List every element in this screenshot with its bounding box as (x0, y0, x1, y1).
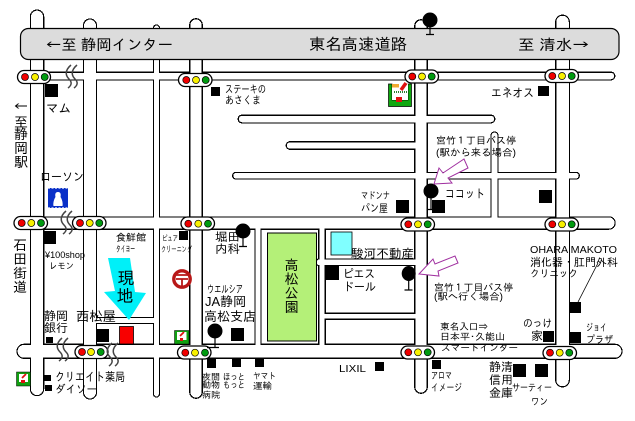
map labels: ステーキの (225, 84, 266, 96)
park name: 園 (284, 299, 298, 315)
vertical label: to Shizuoka station: 静 (14, 126, 28, 142)
map labels: ¥100shop (44, 250, 85, 261)
icon: small convenience store (16, 372, 30, 386)
leader line to clinic (578, 263, 598, 302)
vertical label: to Shizuoka station (14, 99, 28, 170)
map labels: クリエイト薬局 (55, 370, 125, 384)
map labels: スマートインター (441, 343, 518, 354)
map labels: ヤマト (253, 371, 276, 381)
map labels: 銀行 (44, 321, 68, 335)
map labels: 消化器・肛門外科 (530, 256, 618, 269)
map labels: もっと (223, 380, 245, 390)
map labels: 静岡 (44, 309, 68, 323)
site label (116, 269, 134, 306)
map labels: タイヨー (116, 244, 135, 254)
vertical label: to Shizuoka station: 至 (14, 114, 28, 130)
map labels: 宮竹１丁目バス停 (436, 135, 516, 147)
map labels: イメージ (431, 382, 462, 394)
map labels: ピエス (343, 267, 375, 281)
map labels: ワン (531, 397, 548, 408)
map labels: 食鮮館 (116, 232, 146, 244)
map labels: エネオス (491, 86, 534, 100)
site marker: red building (120, 326, 134, 344)
icon: Lawson (48, 188, 68, 208)
map labels (40, 84, 618, 408)
expressway label: to Shizuoka IC: ←至 静岡インター (46, 37, 173, 54)
map labels: 家 (531, 329, 543, 343)
site label: 現 (118, 269, 134, 288)
railway wave symbols (57, 65, 118, 366)
site label: 地 (116, 287, 134, 306)
traffic lights (14, 70, 578, 360)
park name (284, 257, 298, 315)
vertical label: Ishida Kaido: 道 (13, 279, 27, 295)
map labels: 金庫 (489, 386, 513, 400)
vertical label: Ishida Kaido: 石 (13, 237, 27, 253)
site arrow (104, 258, 146, 320)
map labels: クリーニング (161, 245, 192, 254)
map labels: ジョイ (586, 322, 607, 334)
cyan building (331, 232, 352, 255)
vertical label: Ishida Kaido (13, 237, 27, 295)
map labels: マム (46, 101, 71, 116)
map labels: JA静岡 (205, 294, 246, 309)
map labels: ドール (343, 280, 376, 294)
pink arrow: bus stop to station (419, 256, 458, 276)
map labels: ほっと (223, 372, 245, 382)
park (268, 233, 316, 341)
map labels: OHARA MAKOTO (530, 245, 617, 256)
map labels: 信用 (489, 373, 513, 387)
map labels: サーティー (512, 383, 552, 394)
map labels: 東名入口⇒ (440, 322, 489, 333)
icon: convenience store (388, 83, 412, 106)
vertical label: to Shizuoka station: 駅 (14, 154, 28, 170)
map labels: プラザ (586, 334, 613, 346)
vertical label: to Shizuoka station: ← (14, 99, 28, 113)
map labels: 堀田 (215, 230, 240, 244)
map labels: 病院 (202, 390, 220, 400)
black building markers (43, 84, 581, 391)
map labels: パン屋 (361, 203, 388, 215)
vertical label: Ishida Kaido: 田 (13, 251, 27, 267)
park name: 高 (284, 257, 298, 273)
map labels: ウエルシア (207, 284, 243, 296)
map labels: (駅へ行く場合) (434, 291, 503, 303)
map labels: 高松支店 (204, 309, 256, 324)
bus stop pins (207, 13, 438, 348)
expressway label: Tomei: 東名高速道路 (309, 36, 407, 54)
map labels: 動物 (202, 380, 220, 390)
expressway band (20, 28, 619, 60)
map labels: ココット (445, 187, 485, 201)
icon: small convenience store (174, 330, 189, 344)
map labels: 内科 (215, 242, 240, 256)
map labels: ピュア (162, 234, 178, 243)
map labels: クリニック (530, 268, 578, 280)
map labels: 西松屋 (76, 309, 116, 324)
post office mark (174, 271, 190, 287)
map labels: 静清 (489, 360, 513, 374)
map labels: のっけ (523, 318, 552, 330)
map labels: ダイソー (55, 383, 97, 396)
map labels: 駿河不動産 (351, 247, 414, 261)
map labels: LIXIL (339, 364, 366, 375)
expressway label: to Shimizu: 至 清水 → (518, 37, 589, 54)
pink arrow: bus stop from station (434, 159, 468, 184)
vertical label: Ishida Kaido: 街 (13, 265, 27, 281)
map labels: マドンナ (361, 191, 390, 202)
map labels: レモン (49, 261, 74, 271)
park name: 公 (284, 285, 298, 301)
map labels: 運輸 (253, 381, 272, 391)
map labels: 夜間 (202, 372, 220, 382)
map labels: あさくま (225, 94, 261, 107)
park name: 松 (284, 271, 298, 287)
map labels: 宮竹１丁目バス停 (434, 282, 513, 294)
map labels: (駅から来る場合) (436, 148, 516, 159)
map labels: アロマ (431, 371, 452, 382)
vertical label: to Shizuoka station: 岡 (14, 140, 28, 156)
map labels: ローソン (40, 170, 84, 184)
map labels: 日本平･久能山 (440, 331, 505, 343)
